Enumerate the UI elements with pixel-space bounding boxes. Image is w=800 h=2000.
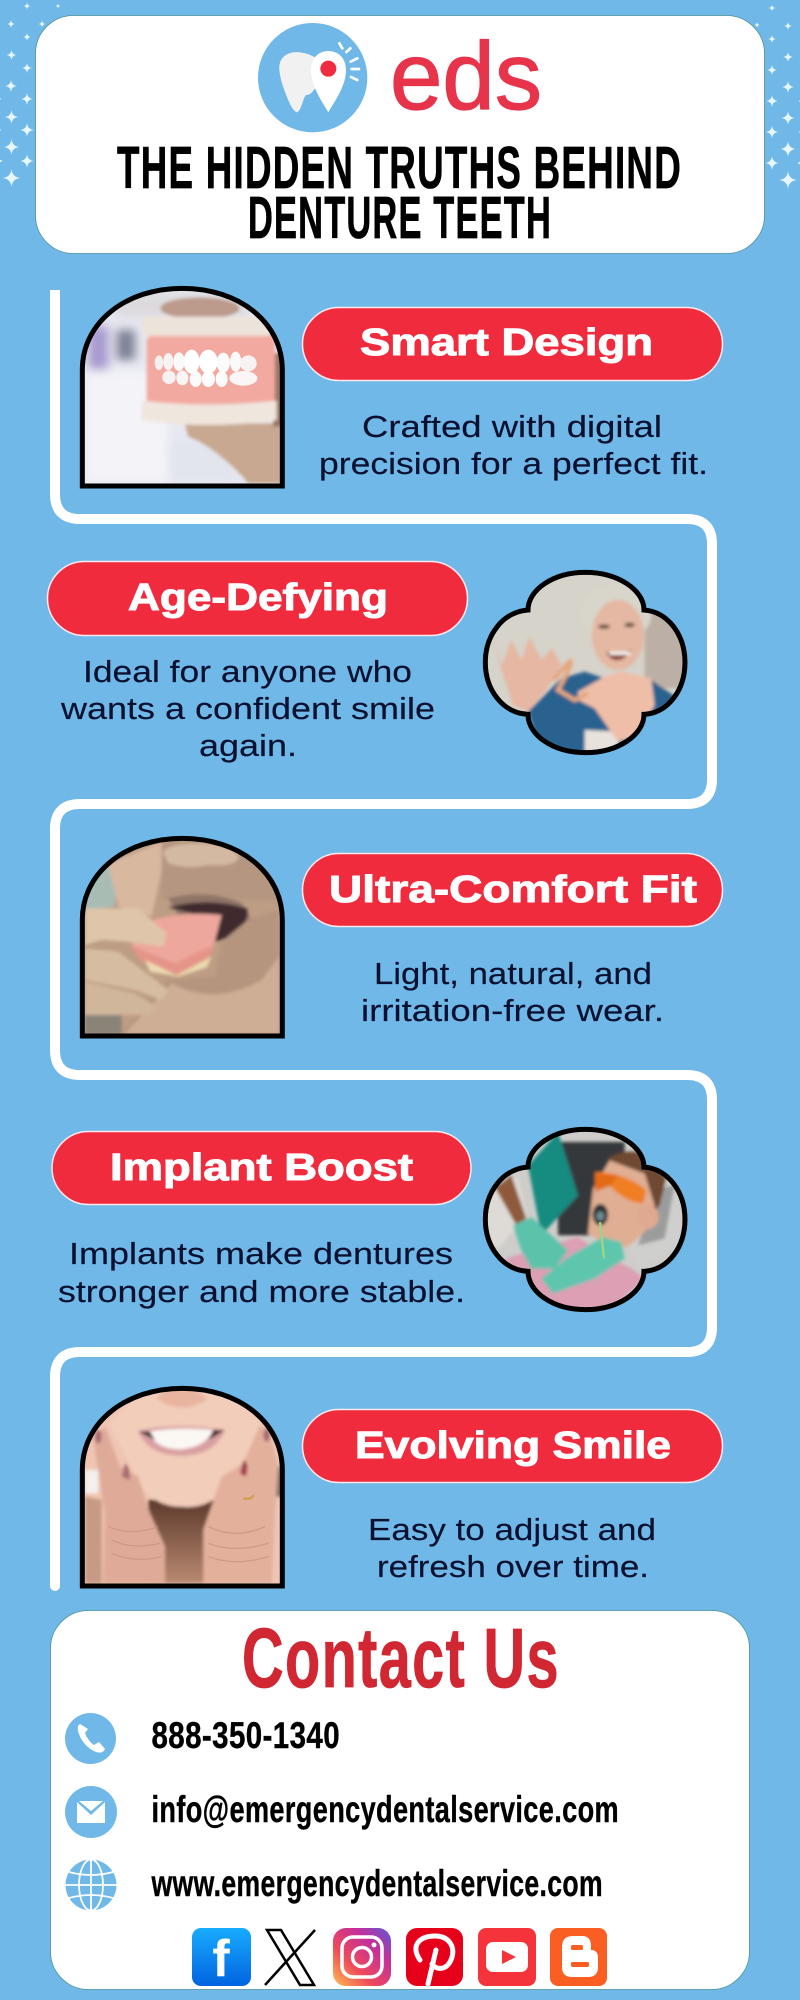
icon: youtube <box>478 1928 536 1986</box>
icon: phone <box>65 1713 116 1764</box>
description <box>319 409 708 481</box>
photo: smile framed by hands <box>75 1380 290 1595</box>
icon: facebook: f <box>212 1930 230 1988</box>
photo: denture model <box>75 280 290 495</box>
description <box>368 1512 656 1584</box>
photo: senior woman holding denture <box>478 565 693 760</box>
pill heading <box>302 1410 722 1482</box>
icon: X <box>265 1930 315 1985</box>
social icons <box>192 1928 607 1988</box>
description <box>60 654 435 763</box>
description: again. <box>199 728 297 763</box>
title: DENTURE TEETH <box>248 185 552 251</box>
icon: eds logo tooth and pin <box>258 23 367 132</box>
decorative sparkles right <box>754 4 800 189</box>
icon: mail <box>65 1786 117 1838</box>
connector path <box>50 290 712 1591</box>
icon: facebook <box>192 1928 251 1988</box>
pill heading: Evolving Smile <box>355 1425 671 1467</box>
logo wordmark: eds <box>390 23 542 130</box>
pill heading <box>302 854 722 926</box>
panel: implant boost <box>52 1122 693 1317</box>
description: wants a confident smile <box>60 691 435 726</box>
panel: smart design <box>75 280 722 495</box>
description: stronger and more stable. <box>58 1274 465 1309</box>
description <box>58 1236 465 1309</box>
pill heading: Ultra-Comfort Fit <box>329 869 697 911</box>
panel: age-defying <box>48 562 693 763</box>
icon: instagram <box>333 1928 391 1986</box>
panel: header <box>36 16 764 254</box>
decorative sparkles left <box>0 2 60 187</box>
description <box>361 956 664 1028</box>
contact heading: Contact Us <box>242 1611 560 1705</box>
pill heading <box>52 1132 471 1204</box>
description: irritation-free wear. <box>361 993 664 1028</box>
icon: globe <box>66 1860 116 1910</box>
website: www.emergencydentalservice.com <box>151 1863 603 1904</box>
description: refresh over time. <box>377 1549 649 1584</box>
description: precision for a perfect fit. <box>319 446 708 481</box>
pill heading: Smart Design <box>360 322 653 364</box>
panel: evolving smile <box>75 1380 722 1595</box>
icon: pinterest <box>406 1928 463 1986</box>
panel: ultra-comfort fit <box>75 830 722 1045</box>
email: info@emergencydentalservice.com <box>152 1789 619 1830</box>
panel: contact <box>50 1610 750 1990</box>
phone number: 888-350-1340 <box>152 1715 340 1756</box>
description: Implants make dentures <box>69 1236 453 1271</box>
photo: denture held at mouth <box>75 830 290 1045</box>
description: Ideal for anyone who <box>83 654 412 689</box>
pill heading: Implant Boost <box>110 1147 413 1189</box>
description: Crafted with digital <box>362 409 662 444</box>
pill heading <box>48 562 468 636</box>
title <box>117 135 682 251</box>
description: Easy to adjust and <box>368 1512 656 1547</box>
pill heading: Age-Defying <box>128 577 388 619</box>
photo: dental patient in orange glasses <box>478 1122 693 1317</box>
icon: blogger <box>550 1928 607 1986</box>
pill heading <box>302 308 722 380</box>
description: Light, natural, and <box>374 956 652 991</box>
